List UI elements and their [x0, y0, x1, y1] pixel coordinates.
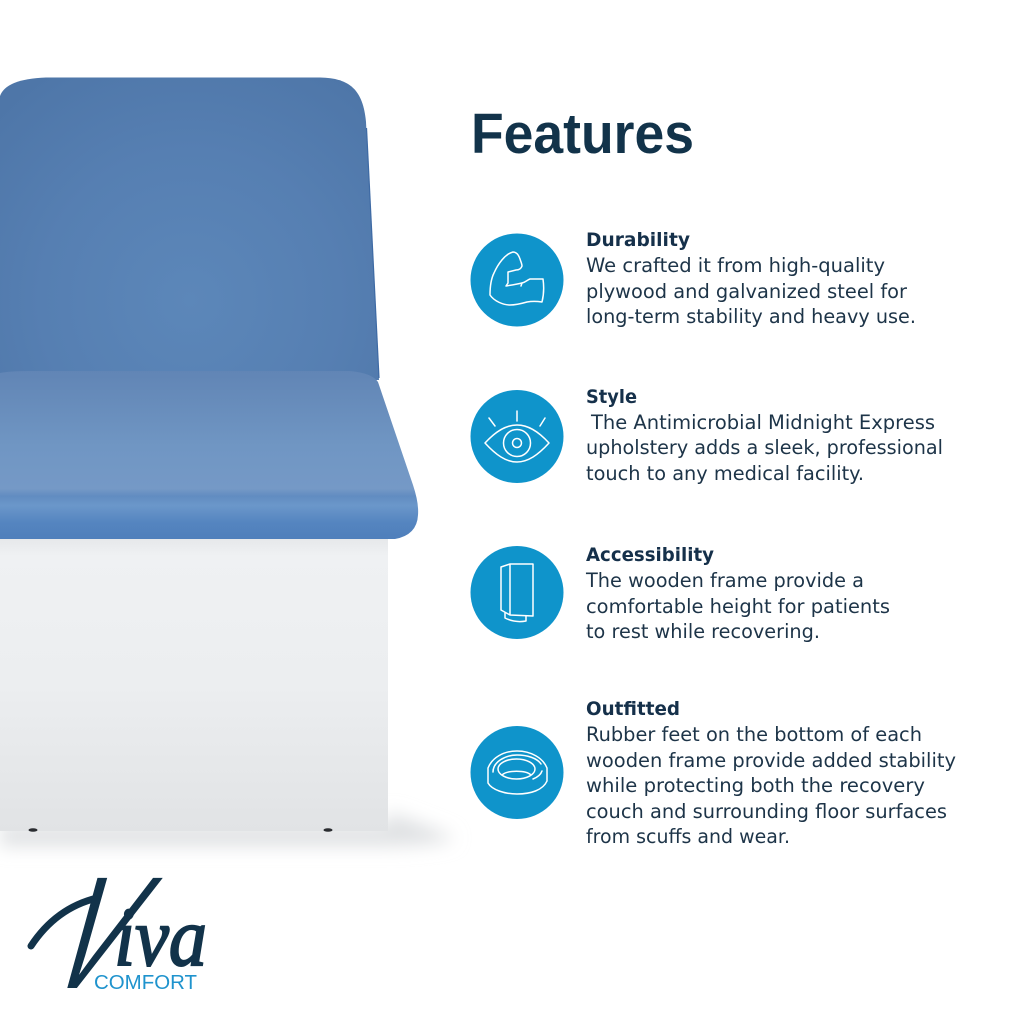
rubber feet — [28, 828, 332, 832]
floor shadow — [0, 812, 455, 846]
seat cushion — [0, 371, 418, 539]
feature: outfitted — [470, 698, 956, 848]
text: style: The Antimicrobial Midnight Express — [590, 411, 935, 434]
text: accessibility: The wooden frame provide a — [585, 569, 864, 592]
back rest right edge — [366, 128, 379, 378]
back rest — [0, 78, 379, 380]
text: durability: plywood and galvanized steel for — [586, 280, 908, 303]
text: durability — [586, 229, 916, 328]
text: outfitted — [586, 698, 956, 848]
text: durability: We crafted it from high-quality — [586, 254, 885, 277]
text: accessibility: comfortable height for patients — [586, 595, 890, 618]
icon: eye — [470, 390, 564, 483]
logo: Viva Comfort: COMFORT — [94, 972, 197, 994]
wooden base — [0, 535, 388, 831]
text: outfitted: Outfitted — [586, 698, 680, 720]
recovery couch photo — [0, 78, 455, 846]
icon: wooden frame — [470, 546, 564, 639]
feature: style — [470, 386, 943, 485]
logo: Viva Comfort: iva — [114, 891, 207, 984]
text: style: Style — [586, 386, 637, 408]
title: Features — [471, 102, 694, 166]
text: outfitted: couch and surrounding floor surfaces — [586, 800, 947, 823]
text: accessibility: Accessibility — [586, 544, 715, 566]
text: outfitted: wooden frame provide added stability — [586, 749, 956, 772]
text: outfitted: from scuffs and wear. — [586, 825, 790, 848]
text: style: upholstery adds a sleek, professional — [586, 436, 943, 459]
icon: flexed arm — [470, 234, 564, 326]
text: style: touch to any medical facility. — [586, 462, 864, 485]
text: outfitted: while protecting both the recovery — [586, 774, 925, 797]
feature: durability — [470, 229, 916, 328]
feature: accessibility — [470, 544, 890, 643]
text: durability: long-term stability and heavy use. — [586, 305, 916, 328]
text: outfitted: Rubber feet on the bottom of each — [586, 723, 922, 746]
text: accessibility: to rest while recovering. — [586, 620, 820, 643]
text: durability: Durability — [586, 229, 691, 251]
text: style — [586, 386, 943, 485]
logo: Viva Comfort: V — [21, 843, 182, 1022]
icon: rubber foot — [470, 726, 564, 819]
text: accessibility — [585, 544, 890, 643]
